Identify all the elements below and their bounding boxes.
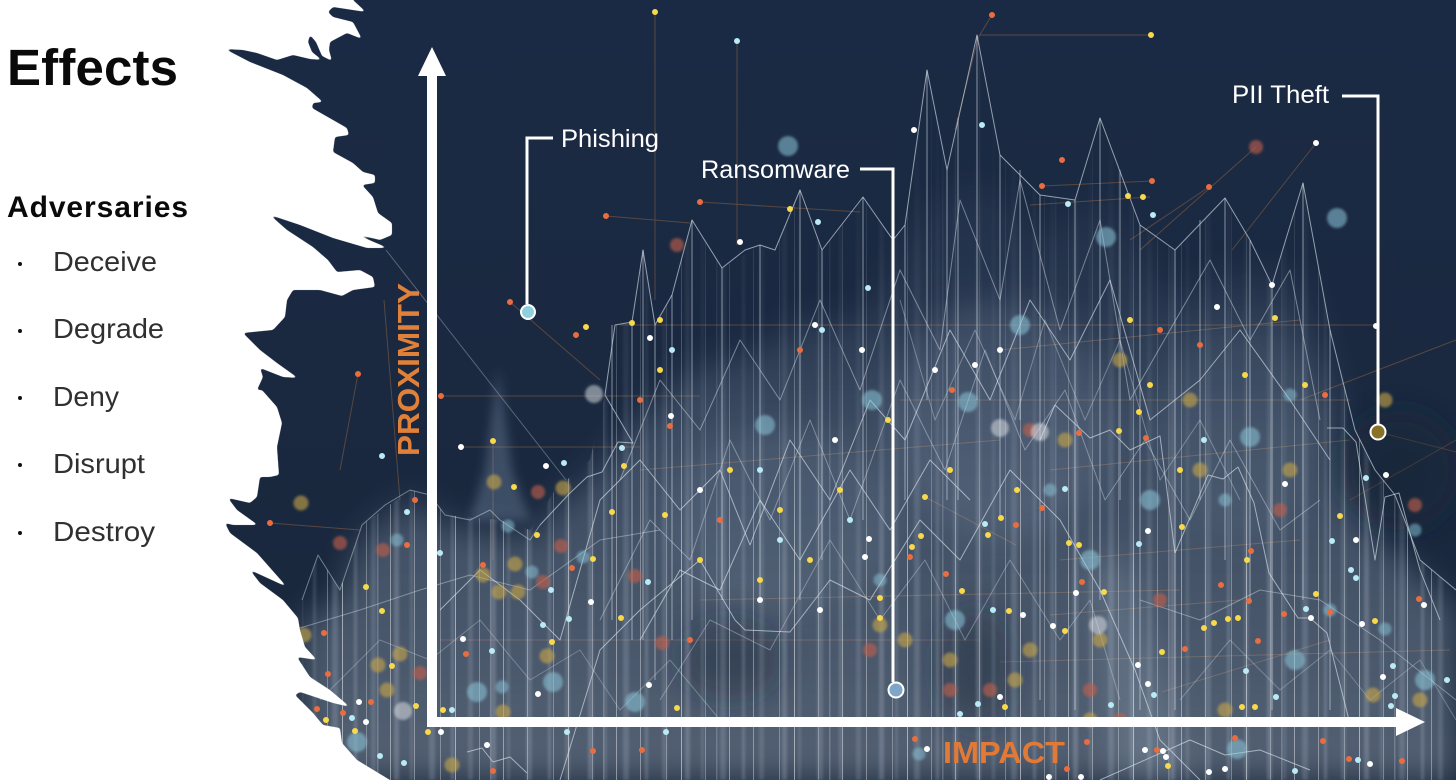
axis label: proximity: PROXIMITY [391, 283, 426, 456]
axis label: impact: IMPACT [943, 735, 1065, 770]
list item: degrade: Degrade [53, 313, 164, 344]
list item: deny: Deny [53, 381, 119, 412]
heading: adversaries: Adversaries [7, 191, 188, 224]
white data points [359, 130, 1424, 777]
orange data points [270, 15, 1419, 771]
dark gaps inside the mass [680, 410, 1456, 730]
ghost distant peak [470, 368, 530, 520]
callout: PII theft [1232, 81, 1386, 440]
title: Effects [7, 39, 178, 96]
light-blue data points [352, 41, 1447, 771]
callout: PII theft: PII Theft [1232, 81, 1329, 109]
background thin connector lines [270, 12, 1456, 692]
torn white edge panel [0, 0, 410, 780]
sharp data points [270, 12, 1447, 777]
list item: disrupt [18, 448, 145, 479]
gray diagonal connector [386, 250, 566, 480]
callout: phishing [521, 125, 659, 319]
mountain glow mass [302, 180, 1456, 780]
arrow: impact axis [427, 708, 1425, 736]
yellow data points [326, 12, 1375, 766]
wireframe ridgelines [300, 35, 1456, 780]
callout: phishing: Phishing [561, 125, 659, 153]
arrow: proximity axis [418, 47, 446, 727]
list item: deceive: Deceive [53, 246, 157, 277]
list item: deny [18, 381, 119, 412]
callout: ransomware [701, 156, 904, 698]
list item: disrupt: Disrupt [53, 448, 145, 479]
list of adversary effects [18, 246, 164, 547]
data mesh vertical stripes [300, 0, 1456, 780]
list item: destroy: Destroy [53, 516, 155, 547]
callout: ransomware: Ransomware [701, 156, 850, 184]
blurred bokeh data points [301, 146, 1425, 765]
central bright haze [660, 300, 1320, 780]
